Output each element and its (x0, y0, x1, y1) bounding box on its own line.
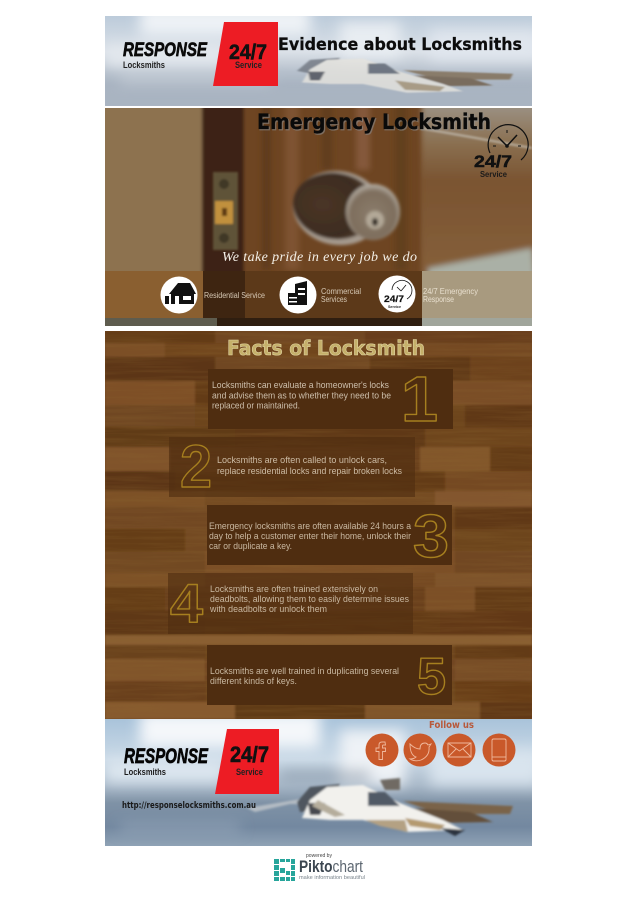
fact 4: deadbolts, allowing them to easily determine issues (210, 594, 409, 605)
service: emergency response (378, 276, 478, 312)
panel: facts of locksmith wood background (105, 331, 532, 719)
heading: Emergency Locksmith: Emergency Locksmith (258, 111, 492, 136)
logo: powered by Piktochart (274, 853, 365, 881)
panel: emergency locksmith door photo (105, 108, 532, 326)
service: commercial: Services (321, 295, 347, 304)
fact 3: car or duplicate a key. (209, 541, 292, 552)
icon: mini 24/7 clock: 24/7 (384, 294, 404, 304)
heading: Emergency Locksmith: Emergency Locksmith (257, 110, 491, 135)
logo: Response Locksmiths: RESPONSE (124, 745, 209, 768)
fact 5 (207, 645, 452, 706)
badge: 24/7 service (213, 22, 278, 86)
fact 1: Locksmiths can evaluate a homeowner's locks (212, 380, 389, 391)
icon: 24/7 service clock: Service (480, 169, 507, 179)
icon: 24/7 service clock: 24/7 (474, 152, 512, 171)
icon: house (165, 283, 196, 304)
fact 2 (169, 433, 415, 500)
heading: Follow us: Follow us (429, 720, 474, 731)
website url: http://responselocksmiths.com.au (122, 801, 256, 811)
logo: powered by Piktochart: make information beautiful (299, 875, 365, 881)
fact 5: different kinds of keys. (210, 676, 297, 687)
fact 3: day to help a customer enter their home, unlock their (209, 531, 411, 542)
service: emergency response: 24/7 Emergency (423, 287, 478, 296)
logo: Response Locksmiths: RESPONSE (123, 39, 208, 61)
image: keys (247, 778, 513, 836)
fact 4 (168, 572, 413, 634)
image: keys (297, 58, 513, 93)
fact 2: 2 (180, 433, 212, 500)
fact 3 (207, 503, 452, 570)
fact 1 (208, 363, 453, 435)
icon: building (288, 281, 307, 305)
badge: 24/7 service: 24/7 (229, 41, 267, 64)
icon: piktochart mark (274, 859, 296, 881)
icon: facebook (366, 734, 398, 766)
badge: 24/7 service (215, 729, 279, 794)
icon: twitter (404, 734, 436, 766)
panel: footer banner (105, 712, 540, 846)
badge: 24/7 service: Service (235, 60, 262, 70)
tagline: We take pride in every job we do (222, 250, 417, 265)
image: deadbolt lock (288, 165, 400, 251)
icon: mini 24/7 clock: Service (388, 304, 402, 309)
badge: 24/7 service: Service (236, 767, 263, 778)
heading: Facts of Locksmith: Facts of Locksmith (227, 336, 425, 360)
service: emergency response: Response (423, 295, 454, 304)
badge: 24/7 service: 24/7 (230, 742, 269, 767)
panel: top banner (105, 16, 532, 106)
service: residential: Residential Service (204, 291, 265, 300)
icon: 24/7 service clock (474, 125, 528, 179)
image: latch plate (213, 172, 238, 250)
fact 1: and advise them as to whether they need to be (212, 390, 391, 402)
fact 3: Emergency locksmiths are often available 24 hours a (209, 521, 412, 532)
fact 2: Locksmiths are often called to unlock cars, (217, 455, 387, 466)
service: residential (160, 276, 265, 314)
bottom band (105, 271, 532, 326)
logo: Response Locksmiths: Locksmiths (124, 767, 166, 778)
logo: Response Locksmiths (123, 39, 208, 70)
icon: mini 24/7 clock (384, 280, 412, 309)
fact 4: with deadbolts or unlock them (209, 604, 327, 615)
infographic (105, 16, 532, 881)
fact 4: 4 (170, 572, 203, 634)
service: commercial: Commercial (321, 287, 361, 296)
fact 1: replaced or maintained. (212, 400, 300, 412)
fact 3: 3 (413, 503, 449, 570)
logo: powered by Piktochart: powered by (306, 853, 332, 859)
fact 5: Locksmiths are well trained in duplicating several (210, 666, 399, 677)
logo: powered by Piktochart: Piktochart (299, 857, 363, 876)
service: commercial (280, 276, 361, 314)
fact 2: replace residential locks and repair broken locks (217, 466, 402, 477)
fact 5: 5 (417, 648, 446, 706)
logo: Response Locksmiths (124, 745, 209, 778)
fact 1: 1 (401, 363, 438, 435)
logo: Response Locksmiths: Locksmiths (123, 60, 165, 70)
fact 4: Locksmiths are often trained extensively on (210, 584, 378, 595)
icon: email (442, 734, 476, 766)
title: Evidence about Locksmiths: Evidence about Locksmiths (278, 35, 522, 55)
icon: mobile phone (482, 734, 516, 766)
